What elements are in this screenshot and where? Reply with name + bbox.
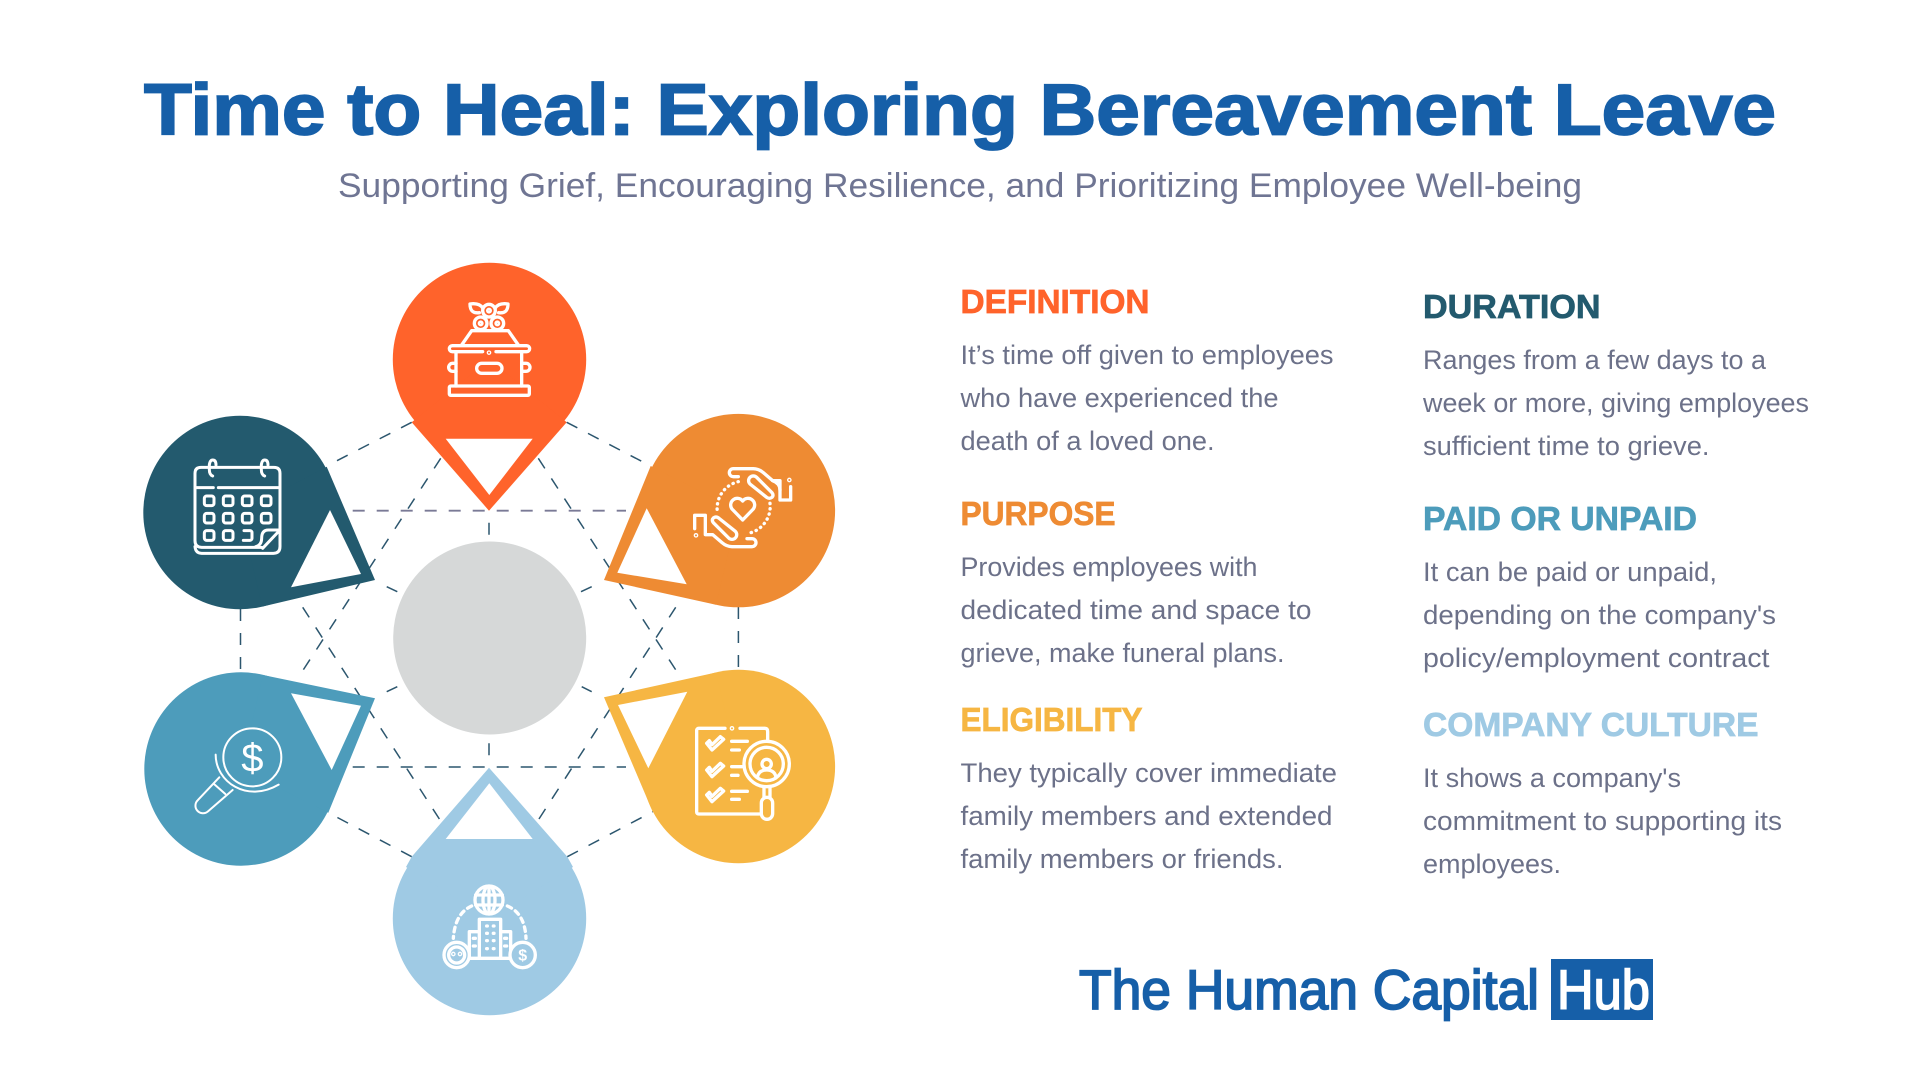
text block: company culture: commitment to supporting its	[1423, 806, 1782, 836]
text block: duration: week or more, giving employees	[1422, 388, 1809, 418]
text block: purpose: Provides employees with	[960, 552, 1258, 582]
text block: purpose: PURPOSE	[960, 495, 1116, 532]
logo: The Human Capital Hub: The Human Capital	[1079, 958, 1539, 1021]
title: Time to Heal: Exploring Bereavement Leave	[144, 70, 1776, 150]
text block: company culture: employees.	[1423, 849, 1561, 879]
text block: purpose: dedicated time and space to	[960, 595, 1312, 625]
text block: duration: sufficient time to grieve.	[1423, 431, 1710, 461]
pin: duration	[143, 416, 375, 609]
text block: duration	[1422, 288, 1809, 461]
text block: definition: It’s time off given to employees	[960, 340, 1334, 370]
pin: paid or unpaid	[144, 672, 375, 866]
icon: magnifier with dollar	[195, 728, 281, 813]
text block: company culture	[1423, 706, 1782, 879]
pin: eligibility	[604, 670, 835, 863]
text block: paid or unpaid: It can be paid or unpaid,	[1423, 557, 1717, 587]
text block: eligibility: They typically cover immediate	[960, 758, 1337, 788]
icon: caring hands with heart	[695, 469, 791, 547]
icon: magnifier with dollar: $	[241, 737, 263, 781]
icon: casket with flowers	[449, 304, 530, 395]
text block: purpose: grieve, make funeral plans.	[960, 638, 1284, 668]
icon: global company	[444, 886, 535, 968]
text block: paid or unpaid	[1423, 500, 1776, 673]
text block: company culture: COMPANY CULTURE	[1423, 706, 1758, 743]
text block: duration: Ranges from a few days to a	[1423, 345, 1767, 375]
subtitle: Supporting Grief, Encouraging Resilience, and Prioritizing Employee Well-being	[338, 167, 1582, 205]
pin: company culture	[393, 768, 586, 1015]
text block: paid or unpaid: PAID OR UNPAID	[1423, 500, 1697, 537]
text block: company culture: It shows a company's	[1423, 763, 1681, 793]
text block: eligibility	[960, 701, 1337, 874]
text block: paid or unpaid: policy/employment contract	[1423, 643, 1770, 673]
icon: checklist with magnifier	[697, 728, 789, 819]
centre circle	[393, 542, 586, 734]
text block: eligibility: family members or friends.	[960, 844, 1284, 874]
text block: eligibility: ELIGIBILITY	[960, 701, 1142, 738]
text block: definition: who have experienced the	[959, 383, 1278, 413]
text block: definition	[959, 283, 1334, 456]
icon: global company: $	[518, 948, 527, 965]
diagram: dashed network connecting the pins	[240, 422, 738, 857]
text block: eligibility: family members and extended	[960, 801, 1332, 831]
pin: purpose	[604, 414, 835, 607]
text block: definition: DEFINITION	[960, 283, 1150, 320]
logo: The Human Capital Hub: Hub	[1557, 958, 1650, 1021]
text block: definition: death of a loved one.	[960, 426, 1214, 456]
text block: duration: DURATION	[1423, 288, 1600, 325]
icon: calendar	[195, 460, 280, 553]
text block: purpose	[960, 495, 1312, 668]
text block: paid or unpaid: depending on the company's	[1423, 600, 1776, 630]
pin: definition	[393, 263, 586, 511]
